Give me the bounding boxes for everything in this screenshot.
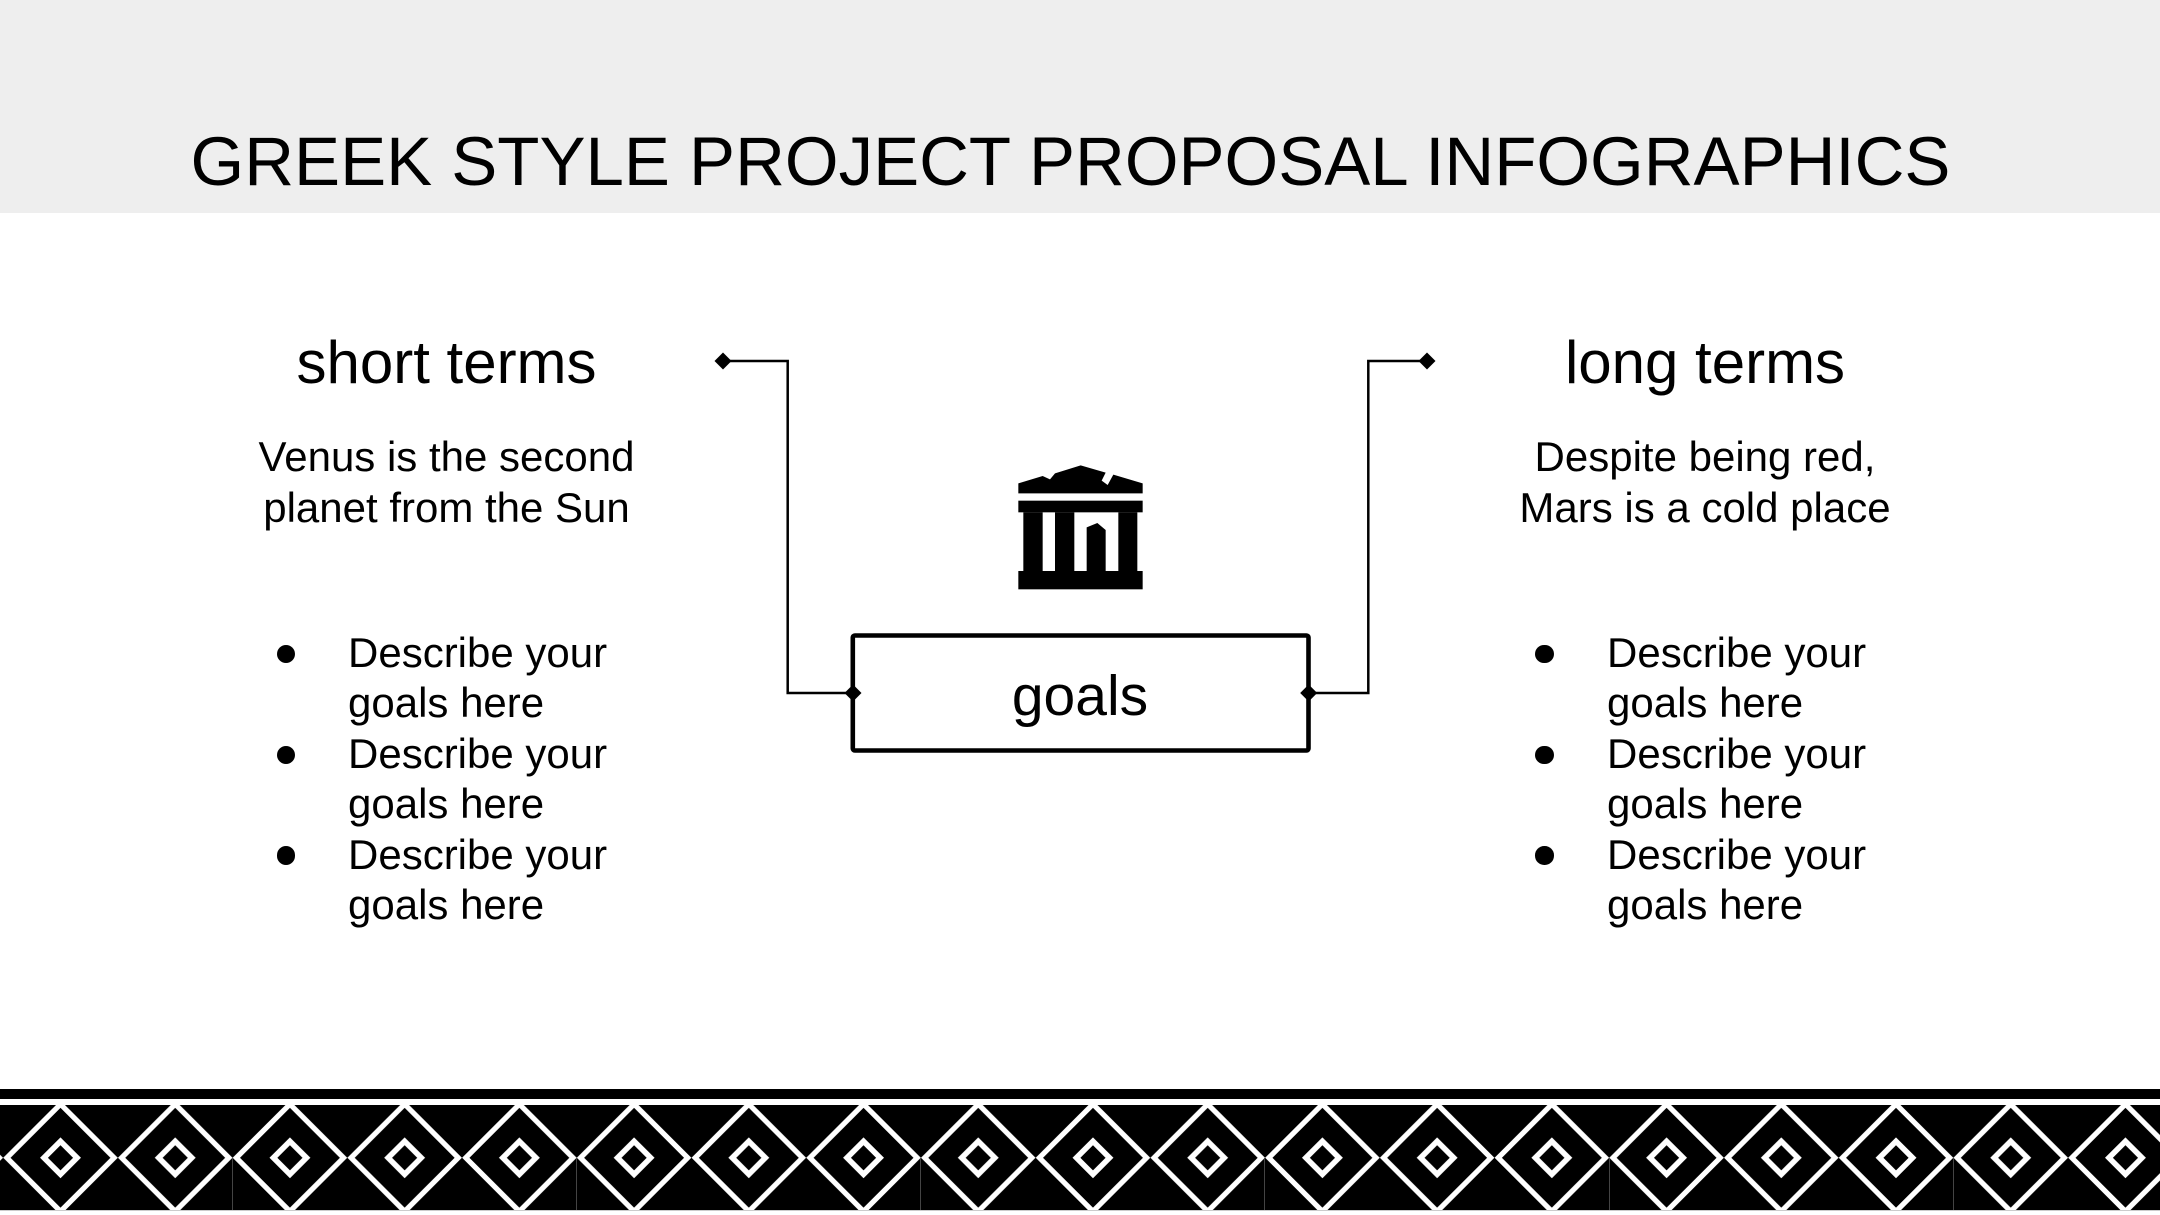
heading: long terms: long terms — [1565, 329, 1845, 396]
bullet 3: Describe your — [1607, 831, 1866, 878]
bullet 2: Describe your — [348, 730, 607, 777]
panel: short terms — [258, 329, 634, 928]
bullet 2: goals here — [348, 780, 544, 827]
bullet 3: goals here — [348, 881, 544, 928]
heading: short terms: short terms — [296, 329, 597, 396]
bullet 1: goals here — [348, 679, 544, 726]
text block: short terms description — [258, 433, 634, 531]
panel: long terms — [1519, 329, 1891, 928]
bullet 2 — [1535, 730, 1866, 827]
goals label: goals — [1012, 664, 1148, 728]
bullet 1: Describe your — [348, 629, 607, 676]
bullet list: short terms goals — [277, 629, 607, 928]
text block: long terms description: Despite being red, — [1535, 433, 1875, 480]
bullet 3: Describe your — [348, 831, 607, 878]
text block: long terms description — [1519, 433, 1891, 531]
bullet 3 — [277, 831, 607, 928]
header band — [0, 0, 2160, 213]
arrow: right connector — [1308, 352, 1436, 693]
bullet 3 — [1535, 831, 1866, 928]
bullet 2: Describe your — [1607, 730, 1866, 777]
bullet 1 — [277, 629, 607, 726]
connector node: box left — [844, 684, 862, 702]
decorative key band — [0, 1089, 2160, 1211]
bullet 3: goals here — [1607, 881, 1803, 928]
text block: short terms description: planet from the Sun — [263, 484, 630, 531]
text block: long terms description: Mars is a cold place — [1519, 484, 1891, 531]
goals box — [853, 636, 1308, 750]
bullet 1: Describe your — [1607, 629, 1866, 676]
connector node: box right — [1300, 684, 1317, 702]
arrow: left connector — [714, 352, 853, 693]
icon: greek temple — [1018, 465, 1143, 589]
bullet 2: goals here — [1607, 780, 1803, 827]
bullet 2 — [277, 730, 607, 827]
bullet list: long terms goals — [1535, 629, 1866, 928]
bullet 1 — [1535, 629, 1866, 726]
title: GREEK STYLE PROJECT PROPOSAL INFOGRAPHICS — [191, 123, 1950, 200]
text block: short terms description: Venus is the second — [259, 433, 634, 480]
bullet 1: goals here — [1607, 679, 1803, 726]
